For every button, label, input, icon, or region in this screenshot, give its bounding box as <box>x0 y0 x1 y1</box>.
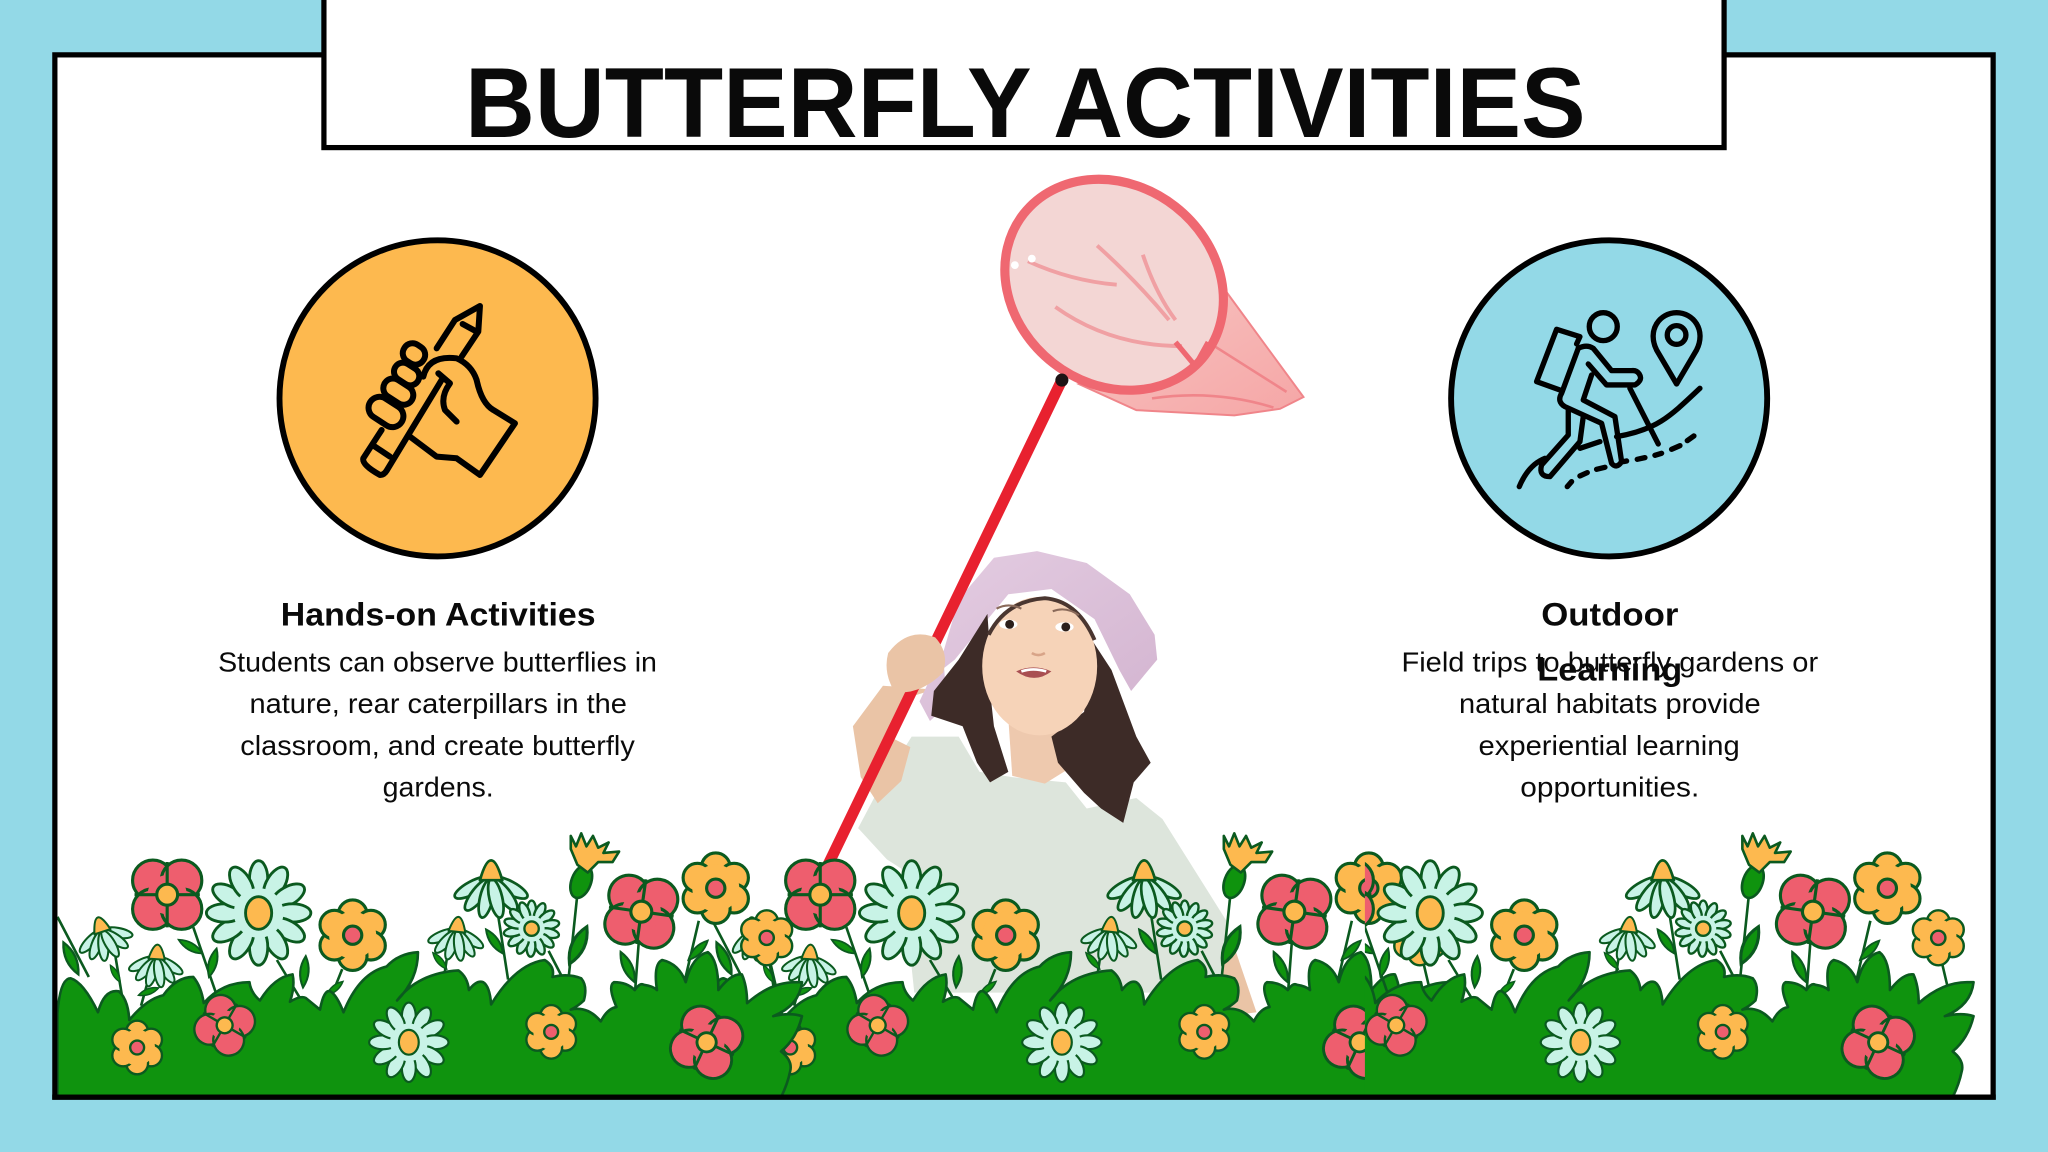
body text: outdoor learning <box>1401 646 1818 803</box>
neck <box>1008 718 1071 784</box>
text block: outdoor learning <box>1401 596 1818 803</box>
flower border: left section <box>57 833 802 1097</box>
text block: hands-on activities <box>218 596 657 803</box>
net pole <box>828 380 1062 865</box>
flower: drooping 4 <box>424 914 488 964</box>
body text: hands-on activities: gardens. <box>383 772 494 803</box>
flower: drooping 1 <box>70 908 140 969</box>
hair <box>931 614 1151 823</box>
hat <box>920 551 1157 721</box>
photo: child holding butterfly net <box>828 136 1304 1019</box>
flower border: right section <box>1364 832 1975 1095</box>
flower border: middle section <box>711 833 1455 1097</box>
bush <box>57 952 802 1097</box>
flower: bottom red 1 <box>189 989 261 1061</box>
body text: outdoor learning: natural habitats provide <box>1459 688 1761 719</box>
panel bottom border <box>52 1095 1996 1100</box>
right arm <box>1208 921 1256 1019</box>
body text: outdoor learning: Field trips to butterfly gardens or <box>1401 646 1818 677</box>
body text: outdoor learning: opportunities. <box>1520 772 1699 803</box>
hand over pole <box>887 634 945 693</box>
flower: bottom orange 1 <box>112 1021 162 1074</box>
face <box>982 597 1097 735</box>
net bag <box>1079 280 1304 415</box>
flower: bottom white daisy <box>369 1003 449 1082</box>
title: BUTTERFLY ACTIVITIES <box>465 48 1586 159</box>
stems and leaves <box>57 895 776 1008</box>
flower: orange 2 <box>683 853 748 923</box>
body text: hands-on activities: classroom, and create butterfly <box>240 730 635 761</box>
flower: bottom red 2 <box>664 1000 749 1085</box>
body text: hands-on activities <box>218 646 657 803</box>
shirt <box>858 737 1226 993</box>
flower: white daisy <box>206 861 311 965</box>
body text: hands-on activities: nature, rear caterpillars in the <box>249 688 627 719</box>
circle icon: hand holding pencil <box>280 240 596 556</box>
left arm <box>853 686 934 803</box>
flower: dandelion <box>566 833 619 901</box>
heading: outdoor learning: Learning <box>1537 650 1682 687</box>
body text: outdoor learning: experiential learning <box>1479 730 1740 761</box>
flower: drooping 2 <box>126 943 186 990</box>
circle icon: hiker with location pin <box>1451 240 1767 556</box>
flower: drooping 3 <box>452 860 530 919</box>
net hoop <box>962 136 1266 434</box>
flower: small daisy <box>503 901 560 957</box>
body text: hands-on activities: Students can observe butterflies in <box>218 646 657 677</box>
flower: orange 3 <box>741 910 792 965</box>
flower: bottom orange 2 <box>526 1005 576 1059</box>
flower: orange <box>320 900 385 970</box>
title box <box>324 0 1724 148</box>
flower: red <box>133 860 202 929</box>
heading: outdoor learning: Outdoor <box>1541 596 1679 633</box>
flower: red 2 <box>602 873 680 951</box>
heading: outdoor learning <box>1537 596 1682 687</box>
heading: hands-on activities: Hands-on Activities <box>281 596 596 633</box>
